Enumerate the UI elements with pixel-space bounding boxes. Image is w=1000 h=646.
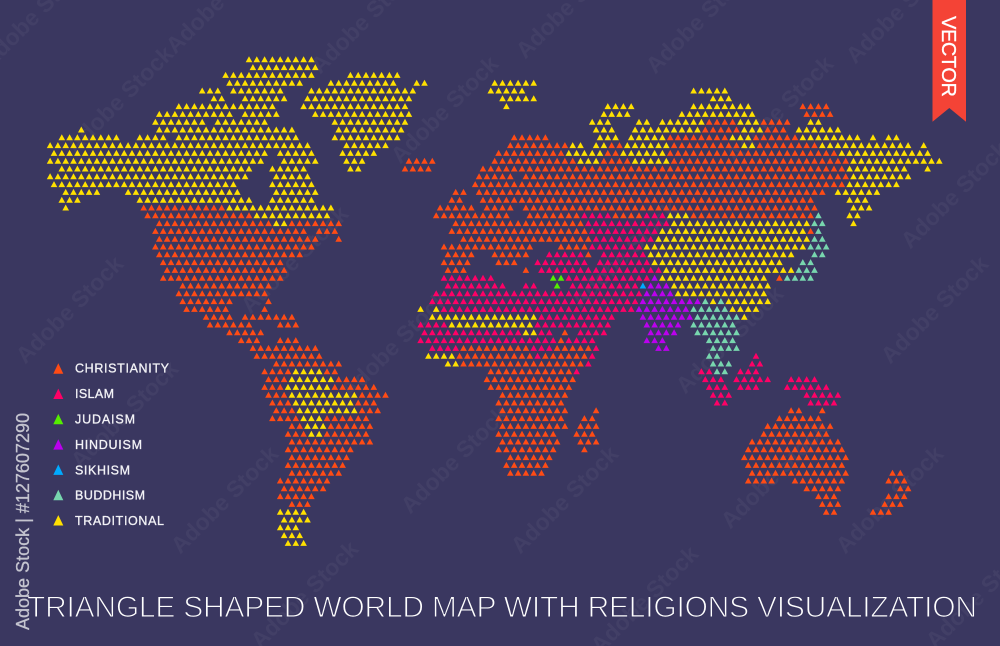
watermarks: Adobe Stock xyxy=(10,250,128,368)
legend item: judaism: JUDAISM xyxy=(75,413,135,427)
world map of triangles xyxy=(46,59,943,543)
legend item: islam: ISLAM xyxy=(75,387,114,401)
watermarks: Adobe Stock xyxy=(395,400,513,518)
watermarks: Adobe Stock xyxy=(385,50,503,168)
watermarks: Adobe Stock xyxy=(875,250,993,368)
watermarks: Adobe Stock xyxy=(505,440,623,558)
watermarks: Adobe Stock xyxy=(60,40,178,158)
title: TRIANGLE SHAPED WORLD MAP WITH RELIGIONS VISUALIZATION xyxy=(27,591,977,624)
watermarks: Adobe Stock xyxy=(715,415,833,533)
legend item: sikhism: SIKHISM xyxy=(75,463,130,477)
map layer: buddhism (teal) xyxy=(690,215,830,371)
legend xyxy=(53,362,170,528)
stock id label: Adobe Stock | #127607290 xyxy=(13,413,33,630)
legend item: christianity: CHRISTIANITY xyxy=(75,362,170,376)
map layer: judaism (green) xyxy=(549,277,565,285)
watermarks: Adobe Stock xyxy=(565,195,683,313)
watermarks: Adobe Stock xyxy=(830,440,948,558)
vector ribbon xyxy=(932,0,966,122)
map layer: islam (magenta) xyxy=(417,215,842,402)
watermarks: Adobe Stock xyxy=(165,440,283,558)
legend item: traditional: TRADITIONAL xyxy=(75,514,164,528)
map layer: sikhism (blue) xyxy=(639,284,647,286)
map layer: traditional (yellow) xyxy=(46,59,943,543)
watermarks: Adobe Stock xyxy=(65,355,183,473)
map layer: hinduism (purple) xyxy=(635,277,701,348)
watermarks: Adobe Stock xyxy=(720,50,838,168)
watermarks: Adobe Stock xyxy=(670,280,788,398)
watermarks: Adobe Stock xyxy=(235,200,353,318)
legend item: buddhism: BUDDHISM xyxy=(75,489,145,503)
vector ribbon: VECTOR xyxy=(937,16,959,97)
watermarks: Adobe Stock xyxy=(335,285,453,403)
legend item: hinduism: HINDUISM xyxy=(75,438,142,452)
legend item: islam xyxy=(53,387,114,401)
map layer: christianity (orange) xyxy=(140,106,912,511)
